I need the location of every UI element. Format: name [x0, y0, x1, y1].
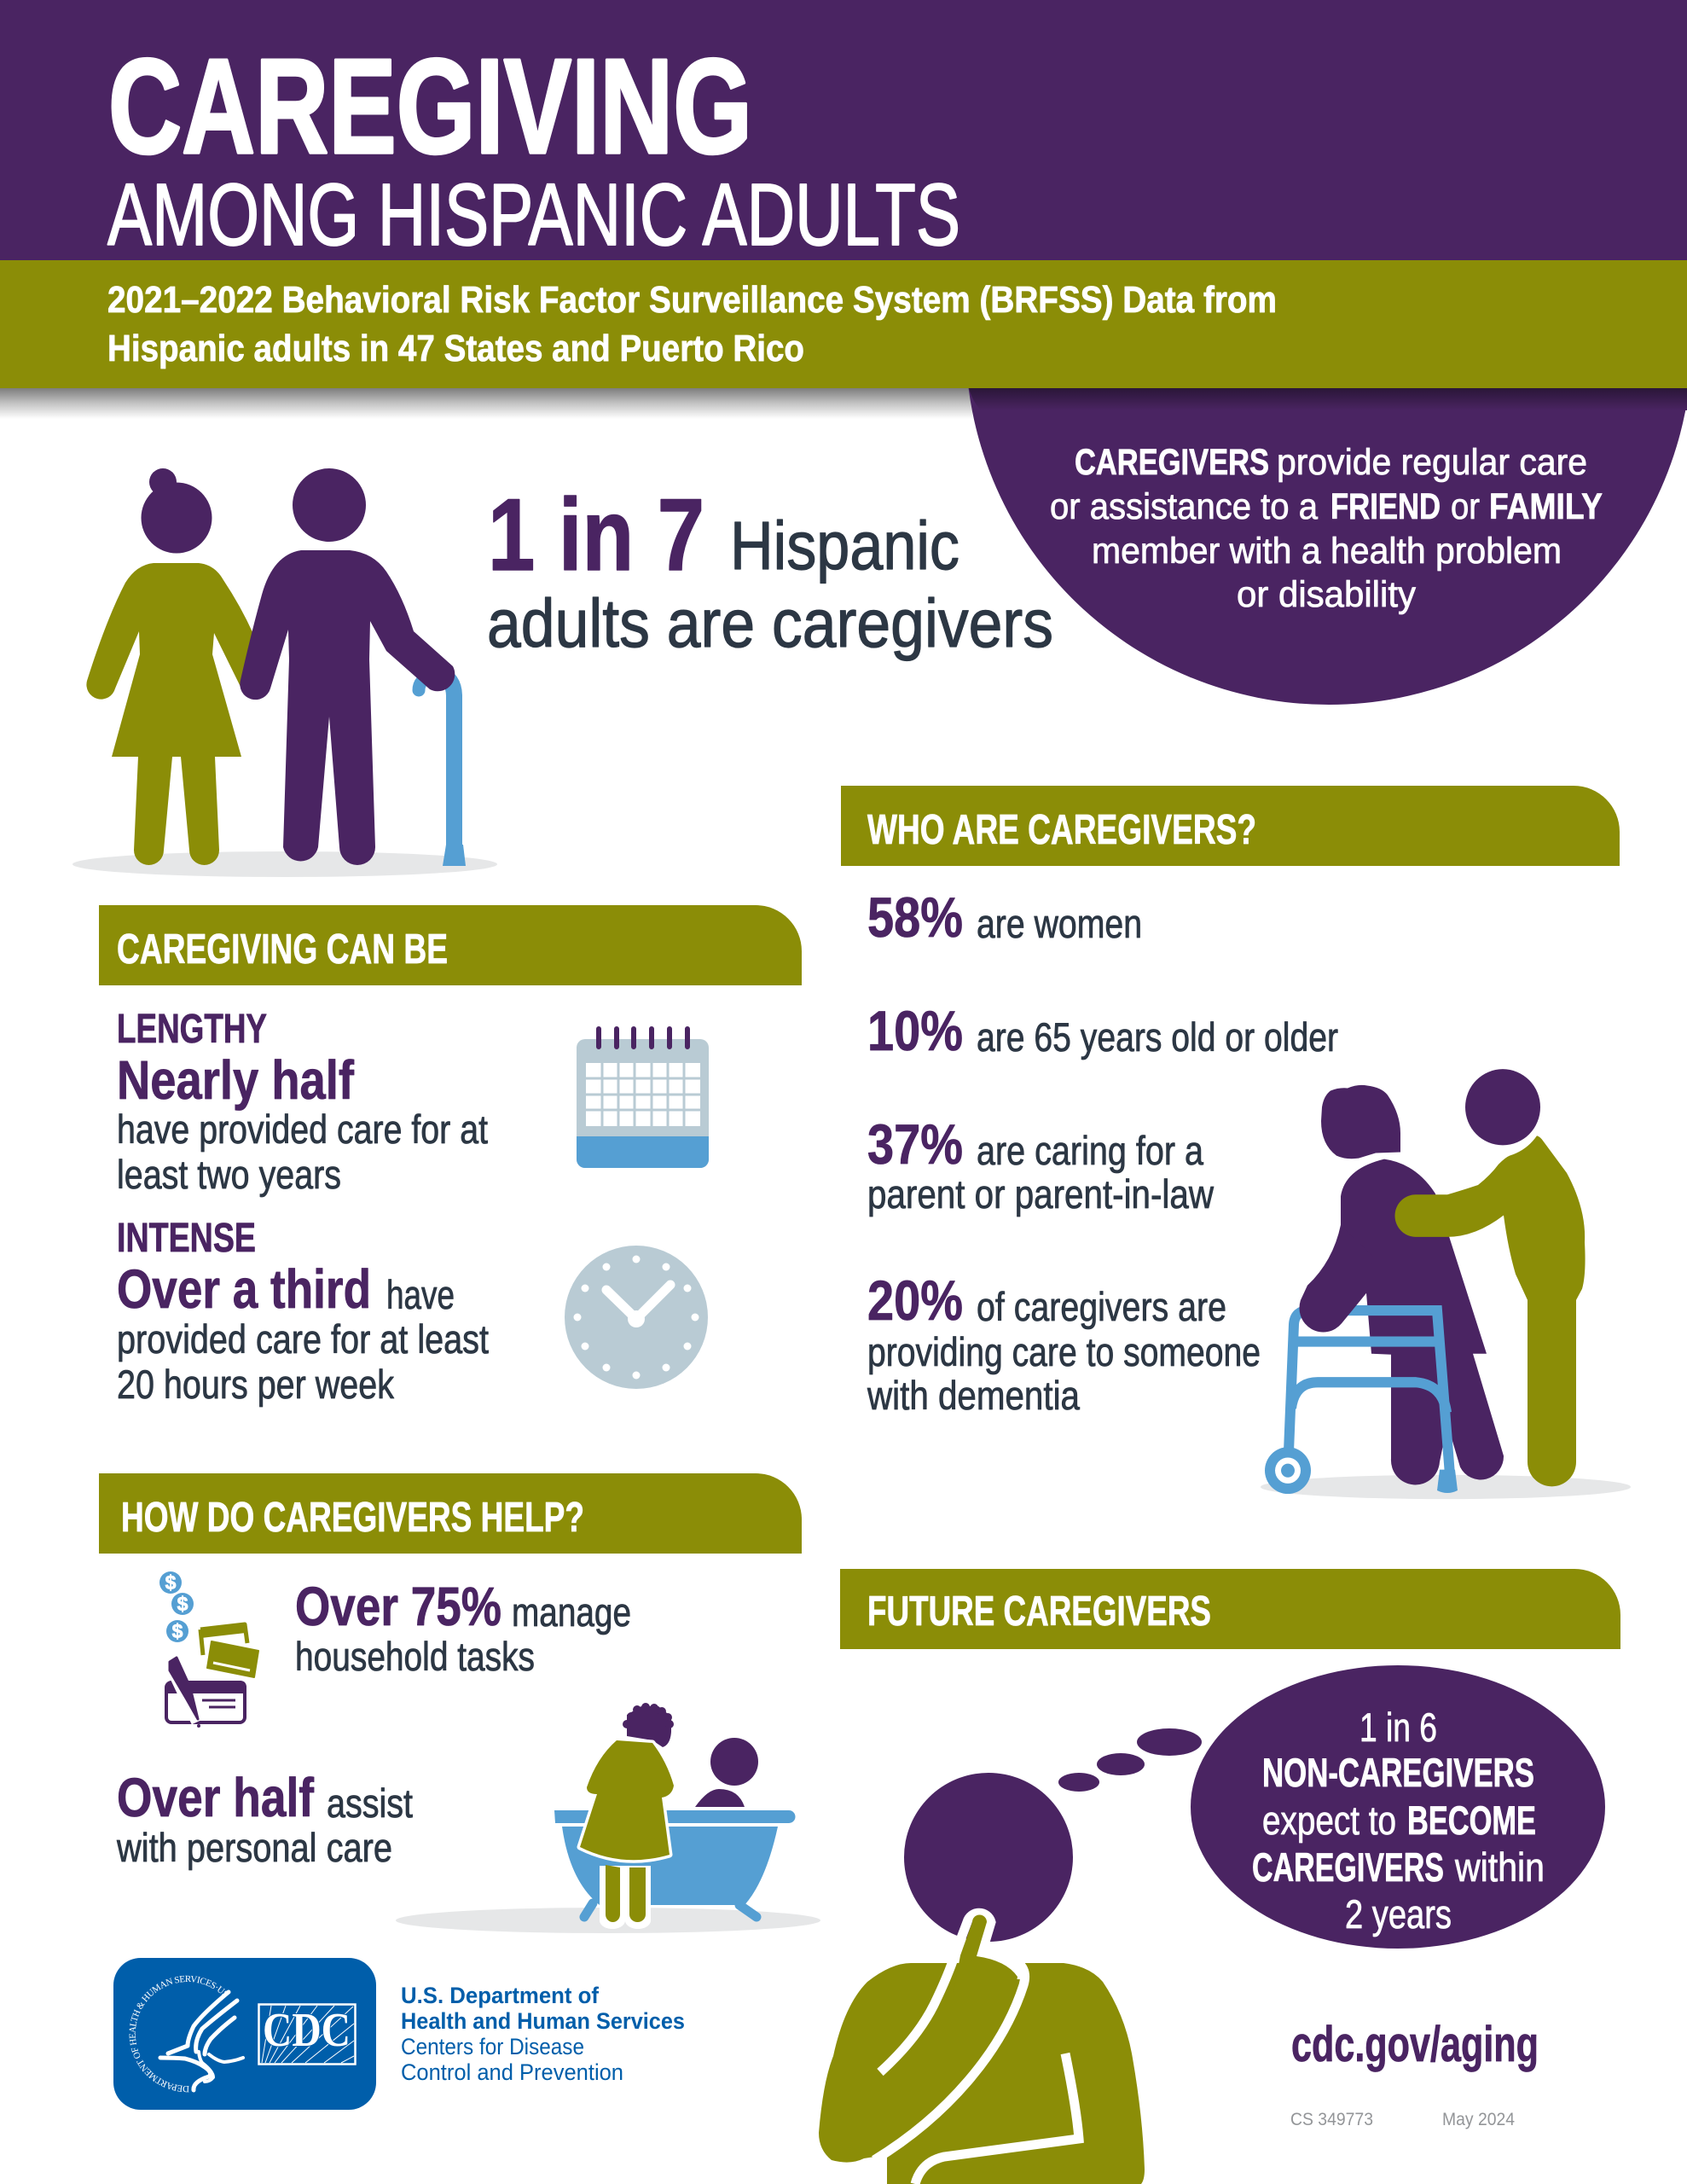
- definition circle: provide regular care: [1277, 442, 1587, 483]
- eagle: [160, 1992, 243, 2090]
- intense text: 20 hours per week: [117, 1362, 394, 1407]
- text: personal care: with personal care: [116, 1825, 392, 1870]
- speech bubble: within: [1454, 1844, 1545, 1890]
- statistic: 1 in 7: Hispanic: [730, 508, 959, 584]
- speech bubble: [1191, 1665, 1605, 1949]
- intense text: INTENSE: [117, 1216, 256, 1261]
- patient body: [1341, 1159, 1504, 1484]
- lengthy text: [117, 1007, 488, 1197]
- heading: CAREGIVING CAN BE: [117, 926, 448, 973]
- lengthy text: Nearly half: [117, 1049, 355, 1111]
- website link: cdc.gov/aging: [1291, 2017, 1539, 2072]
- intense text: [117, 1216, 489, 1407]
- stat: 58%: 58%: [867, 886, 963, 949]
- statistic: 1 in 7: adults are caregivers: [487, 585, 1053, 661]
- icon: bills and cards: [159, 1571, 258, 1728]
- intense text: have: [386, 1272, 455, 1317]
- walker: [1289, 1310, 1450, 1475]
- logo: HHS and CDC: DEPARTMENT OF HEALTH & HUMAN SERVICES·USA: [130, 1976, 227, 2092]
- stat: 37%: [867, 1112, 1215, 1217]
- intense text: provided care for at least: [117, 1316, 489, 1362]
- man: [240, 550, 455, 865]
- speech bubble: NON-CAREGIVERS: [1262, 1750, 1534, 1795]
- heading: [99, 1473, 802, 1554]
- stat: 20%: with dementia: [867, 1373, 1081, 1418]
- patient arm: [1299, 1225, 1373, 1333]
- icon: bills and cards: $: [177, 1593, 188, 1615]
- stat: 20%: of caregivers are: [977, 1284, 1226, 1329]
- text: personal care: Over half: [117, 1767, 315, 1828]
- definition circle: CAREGIVERS: [1075, 442, 1269, 483]
- stat: 20%: 20%: [867, 1269, 963, 1332]
- icon: clock: [565, 1246, 708, 1389]
- agency names: [401, 1983, 685, 2085]
- header band with title: [0, 0, 1687, 264]
- stat: 37%: 37%: [867, 1112, 963, 1176]
- speech bubble: expect to: [1262, 1798, 1396, 1843]
- caregiver head: [1465, 1069, 1540, 1145]
- icon: bills and cards: $: [165, 1571, 177, 1594]
- heading: FUTURE CAREGIVERS: [867, 1589, 1211, 1635]
- icon: calendar: [577, 1029, 709, 1168]
- lengthy text: have provided care for at: [117, 1107, 488, 1152]
- data source banner: 2021–2022 Behavioral Risk Factor Surveillance System (BRFSS) Data from: [107, 279, 1277, 321]
- definition circle: or disability: [1237, 574, 1416, 615]
- statistic: 1 in 7: 1 in 7: [488, 478, 704, 592]
- speech bubble: 2 years: [1345, 1891, 1452, 1937]
- publication date: May 2024: [1442, 2110, 1515, 2129]
- panel: who are caregivers: [841, 786, 1631, 1499]
- speech bubble: CAREGIVERS: [1252, 1844, 1444, 1890]
- agency names: Control and Prevention: [401, 2059, 623, 2085]
- agency names: Centers for Disease: [401, 2034, 584, 2059]
- text: personal care: assist: [327, 1780, 413, 1826]
- definition circle: or: [1451, 486, 1480, 527]
- definition circle: FAMILY: [1489, 486, 1603, 527]
- definition circle: or assistance to a: [1050, 486, 1318, 527]
- stat: 37%: are caring for a: [977, 1128, 1204, 1173]
- text: personal care: [116, 1767, 413, 1870]
- panel: how do caregivers help: [99, 1473, 820, 1933]
- icon: couple with cane: [72, 468, 497, 877]
- patient head: [1321, 1085, 1400, 1159]
- agency names: Health and Human Services: [401, 2008, 685, 2034]
- speech bubble: BECOME: [1407, 1798, 1536, 1843]
- lengthy text: least two years: [117, 1152, 341, 1197]
- heading: HOW DO CAREGIVERS HELP?: [121, 1495, 584, 1541]
- stat: 10%: [867, 999, 1338, 1062]
- data source banner: [0, 260, 1687, 388]
- stat: 58%: are women: [977, 901, 1142, 946]
- heading: [840, 1569, 1620, 1649]
- stat: 10%: are 65 years old or older: [977, 1014, 1338, 1060]
- definition circle: member with a health problem: [1092, 531, 1562, 572]
- woman head: [142, 468, 212, 553]
- text: household tasks: [295, 1576, 631, 1679]
- publication number: CS 349773: [1290, 2110, 1373, 2129]
- definition circle: FRIEND: [1330, 486, 1441, 527]
- heading: WHO ARE CAREGIVERS?: [867, 807, 1256, 853]
- stat: 10%: 10%: [867, 999, 963, 1062]
- cane: [419, 674, 466, 866]
- icon: bills and cards: $: [172, 1620, 183, 1642]
- agency names: U.S. Department of: [401, 1983, 600, 2008]
- text: household tasks: household tasks: [295, 1634, 535, 1679]
- subtitle: AMONG HISPANIC ADULTS: [107, 166, 960, 264]
- heading: [99, 905, 802, 985]
- stat: 20%: [867, 1269, 1261, 1418]
- icon: caregiver helping person with walker: [1261, 1069, 1631, 1499]
- text: household tasks: Over 75%: [295, 1576, 501, 1637]
- text: household tasks: manage: [512, 1589, 631, 1635]
- stat: 20%: providing care to someone: [867, 1329, 1261, 1374]
- stat: 58%: [867, 886, 1142, 949]
- panel: caregiving can be: [99, 905, 802, 1407]
- panel: future caregivers: [819, 1569, 1620, 2184]
- icon: bathing scene: [396, 1703, 820, 1933]
- heading: [841, 786, 1620, 866]
- icon: thinking person: [819, 1773, 1145, 2184]
- CDC box: CDC: [263, 2004, 351, 2057]
- thought bubbles: [1058, 1728, 1202, 1792]
- seal text: [136, 1982, 225, 2086]
- stat: 37%: parent or parent-in-law: [867, 1171, 1215, 1217]
- logo: HHS and CDC: [113, 1958, 376, 2110]
- caregiver: [1395, 1136, 1586, 1486]
- intense text: Over a third: [117, 1258, 371, 1320]
- definition circle: [969, 388, 1687, 705]
- lengthy text: LENGTHY: [117, 1007, 267, 1052]
- woman: [86, 563, 253, 865]
- data source banner: Hispanic adults in 47 States and Puerto Rico: [107, 328, 804, 369]
- speech bubble: 1 in 6: [1359, 1705, 1437, 1750]
- title: CAREGIVING: [108, 32, 752, 182]
- statistic: 1 in 7: [487, 478, 1053, 661]
